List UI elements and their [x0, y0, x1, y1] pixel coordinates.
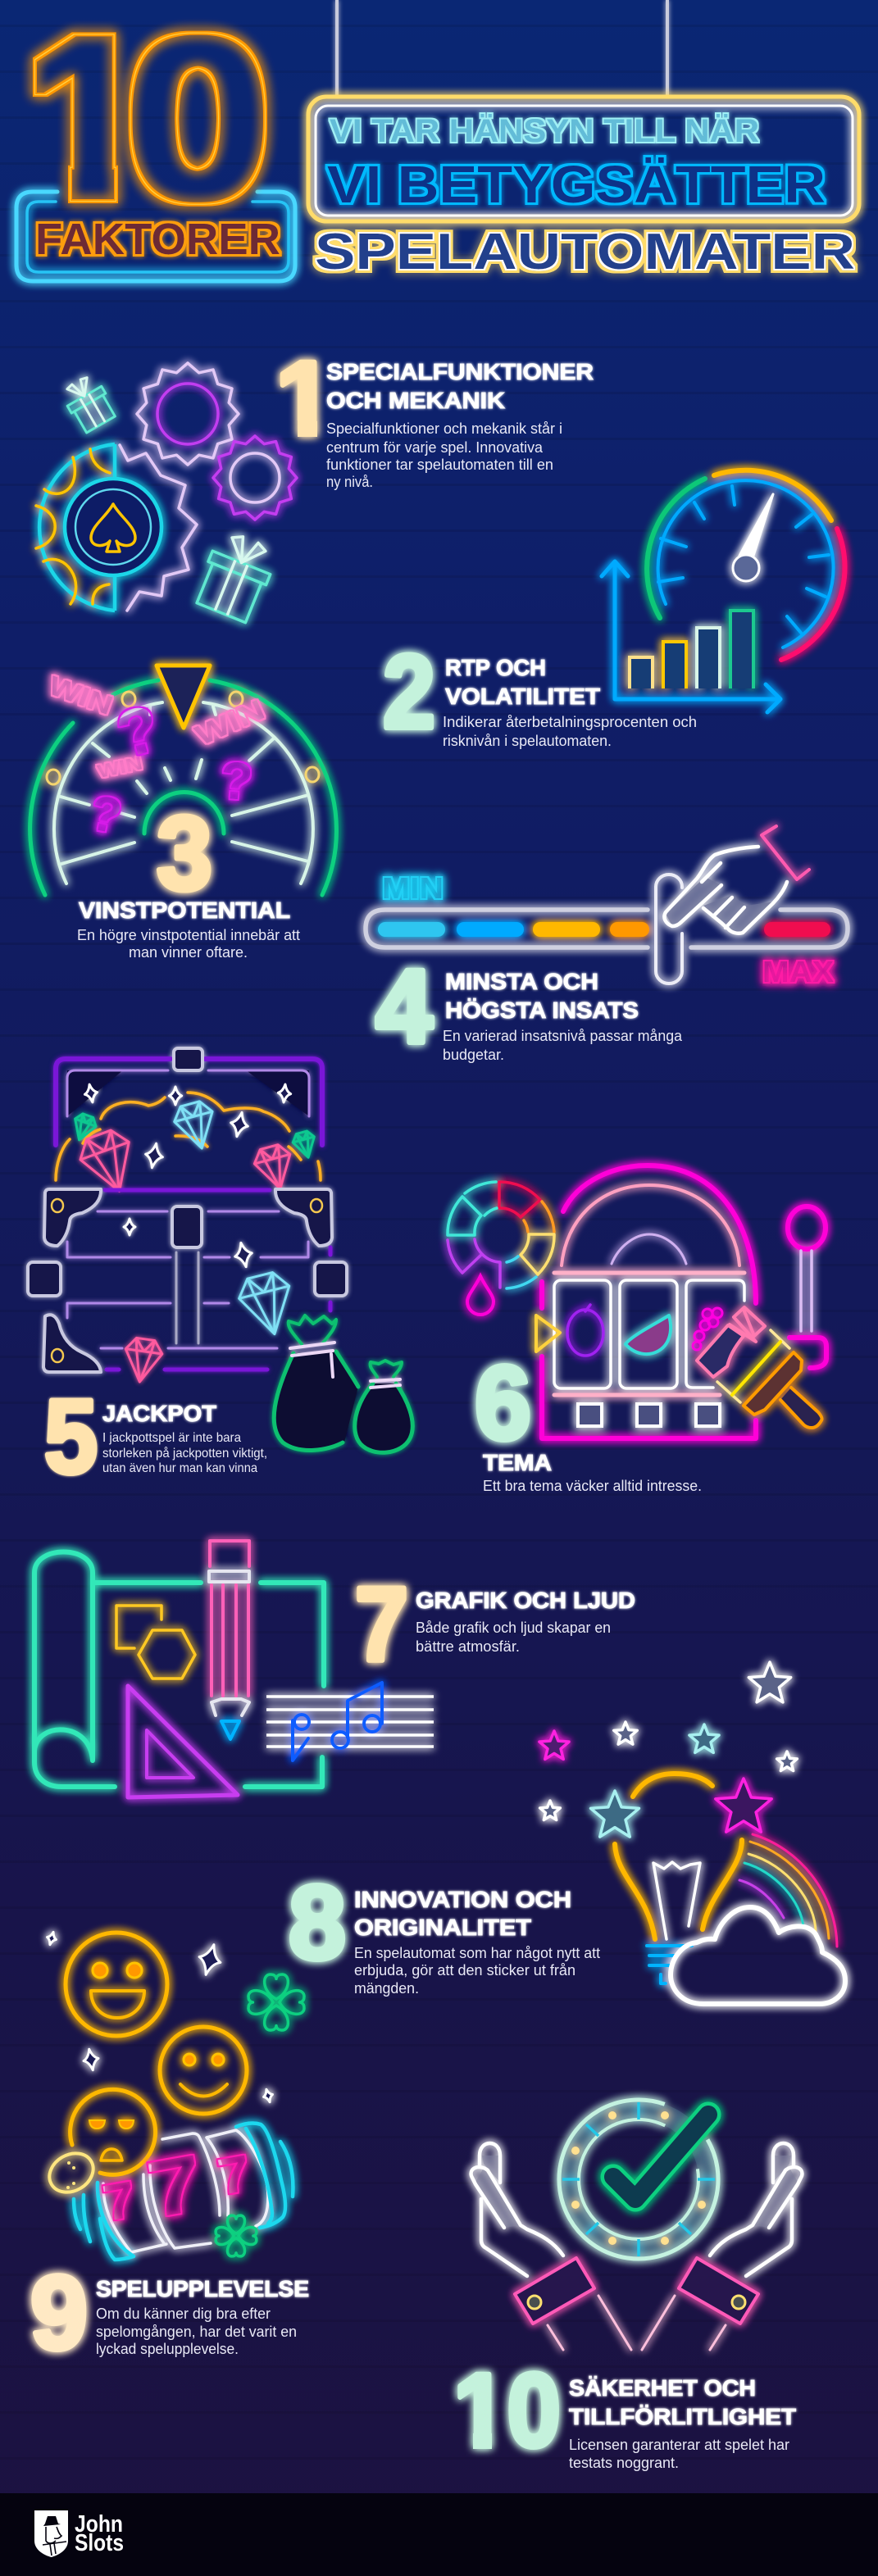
sevens: 7: [141, 2138, 210, 2235]
sign frame: [308, 97, 859, 221]
colour wheel: [448, 1182, 554, 1288]
heading 4: MINSTA OCH: [445, 969, 598, 994]
badge band: [569, 2110, 708, 2249]
heading 10: [569, 2375, 796, 2429]
chip: [36, 444, 161, 611]
sevens: [98, 2138, 255, 2235]
body 1: funktioner tar spelautomaten till en: [326, 457, 553, 473]
faktorer frame: [16, 192, 295, 281]
slider segments: [378, 922, 830, 937]
body 9: spelomgången, har det varit en: [96, 2324, 297, 2340]
icon: hands holding check badge: [471, 2070, 802, 2350]
paint brush: [697, 1307, 821, 1428]
music notes: [293, 1683, 382, 1760]
min label: MIN: [382, 871, 444, 905]
gold arcs: [56, 1093, 321, 1180]
sparkles: [84, 1084, 292, 1269]
reel housing: [74, 2124, 293, 2260]
heading 2: RTP OCH: [445, 655, 546, 680]
heading 4: HÖGSTA INSATS: [445, 997, 639, 1023]
body 1: ny nivå.: [326, 474, 373, 490]
question marks: [85, 691, 255, 844]
body 6: Ett bra tema väcker alltid intresse.: [483, 1478, 702, 1494]
heading 8: [354, 1887, 571, 1940]
panel: factor 10 security: [453, 2070, 802, 2471]
slider handle: [656, 875, 682, 984]
body 3: En högre vinstpotential innebär att: [77, 927, 300, 943]
icon: light bulb with stars, rainbow and cloud: [539, 1662, 845, 2004]
bars: [630, 611, 753, 688]
heading 2: [445, 655, 600, 709]
clovers: [216, 1974, 304, 2256]
question marks: ?: [109, 691, 167, 771]
check mark: [613, 2115, 708, 2199]
number 2: 2: [383, 634, 435, 751]
left hand: [471, 2143, 631, 2350]
hanging wires: [337, 0, 667, 96]
body 5: storleken på jackpotten viktigt,: [102, 1446, 267, 1461]
faktorer word: FAKTORER: [35, 215, 280, 264]
heading 1: SPECIALFUNKTIONER: [326, 359, 594, 384]
set square: [128, 1686, 238, 1797]
chest lines: [67, 1190, 330, 1370]
body 4: budgetar.: [443, 1047, 504, 1063]
badge rings: [530, 2070, 748, 2288]
win labels: WIN: [191, 694, 270, 752]
logo wordmark: [75, 2511, 124, 2556]
bulb: [615, 1774, 742, 1983]
footer: [0, 2493, 878, 2576]
number 7: 7: [355, 1566, 408, 1683]
icon: smileys and slot reels: [43, 1931, 304, 2260]
panel: factor 8 innovation: [289, 1662, 845, 2004]
axes: [602, 561, 780, 712]
heading 3: VINSTPOTENTIAL: [79, 897, 290, 923]
watermelon: [626, 1315, 671, 1354]
stars: [539, 1662, 797, 1837]
panel: factor 3 win potential: [30, 666, 336, 961]
question marks: ?: [218, 750, 255, 811]
body 9: [96, 2306, 297, 2357]
cuff: [762, 826, 809, 879]
top gear: [137, 363, 239, 465]
right reel: [207, 2130, 268, 2226]
left reel: [103, 2174, 166, 2252]
sad face: [71, 2089, 156, 2174]
number 6: 6: [475, 1345, 531, 1462]
reel pointer: [536, 1315, 560, 1352]
body 5: [102, 1431, 267, 1475]
icon: treasure chest: [28, 1048, 412, 1452]
sevens: 7: [213, 2145, 255, 2206]
gift large: [193, 528, 280, 625]
number 8: 8: [289, 1865, 346, 1982]
body 7: Både grafik och ljud skapar en: [416, 1620, 611, 1636]
sevens: 7: [98, 2171, 140, 2233]
machine arch: [542, 1165, 756, 1438]
body 8: En spelautomat som har något nytt att: [354, 1945, 600, 1961]
body 7: bättre atmosfär.: [416, 1638, 520, 1655]
grapes: [693, 1308, 722, 1350]
side gear: [213, 436, 297, 520]
logo shield: [34, 2510, 68, 2557]
heading 10: SÄKERHET OCH: [569, 2375, 756, 2401]
body 2: [443, 714, 697, 749]
body 8: erbjuda, gör att den sticker ut från: [354, 1962, 575, 1979]
yellow shapes: [116, 1606, 195, 1679]
heading 5: JACKPOT: [102, 1401, 216, 1426]
chest hardware: [28, 1189, 347, 1372]
body 3: man vinner oftare.: [129, 944, 248, 961]
badge ticks: [562, 2102, 715, 2256]
number 5: 5: [44, 1379, 98, 1496]
heading 7: GRAFIK OCH LJUD: [416, 1588, 635, 1613]
heading 1: OCH MEKANIK: [326, 388, 505, 413]
number 9: 9: [30, 2255, 88, 2372]
heading 6: TEMA: [483, 1450, 552, 1475]
panel: factor 9 game experience: [30, 1931, 309, 2372]
logo wordmark: Slots: [75, 2530, 124, 2556]
top clasp: [174, 1048, 202, 1070]
heading 4: [445, 969, 639, 1023]
gems: [69, 1099, 319, 1384]
music staff: [266, 1697, 434, 1747]
hand: [664, 847, 787, 934]
slider track: [366, 910, 848, 947]
body 8: mängden.: [354, 1980, 419, 1997]
lights: [47, 692, 319, 784]
right hand: [642, 2143, 802, 2350]
middle reel: [150, 2133, 220, 2248]
heading 1: [326, 359, 594, 413]
body 9: lyckad spelupplevelse.: [96, 2341, 239, 2357]
pencil: [209, 1541, 249, 1739]
panel: factor 6 theme: [448, 1165, 826, 1494]
icon: blueprint pencil and notes: [34, 1541, 434, 1797]
reels: [554, 1280, 744, 1426]
panel: factor 1 special features: [36, 340, 594, 625]
win labels: WIN: [45, 670, 116, 720]
icon: prize wheel: [30, 666, 336, 895]
title block: [16, 0, 859, 281]
lever: [788, 1206, 826, 1368]
chest rivets: [52, 1199, 322, 1362]
money bags: [274, 1315, 412, 1452]
gift small: [59, 372, 118, 434]
happy face: [66, 1933, 167, 2036]
pointer: [157, 666, 210, 728]
big gear: [120, 445, 197, 611]
panel: factor 2 rtp and volatility: [383, 470, 845, 751]
body 1: centrum för varje spel. Innovativa: [326, 439, 544, 456]
badge lights: [571, 2111, 706, 2245]
question marks: ?: [85, 784, 126, 844]
number 10: 10: [453, 2352, 561, 2469]
needle: [733, 494, 773, 581]
panel: factor 4 min and max bet: [366, 826, 848, 1065]
heading 8: INNOVATION OCH: [354, 1887, 571, 1912]
rainbow: [739, 1834, 837, 1947]
wheel rim: [30, 680, 336, 895]
number 4: 4: [375, 948, 433, 1065]
number 3: 3: [157, 795, 212, 912]
number 1: 1: [275, 340, 334, 457]
icon: bet slider: [366, 826, 848, 988]
lemon: [43, 2146, 100, 2200]
plum: [567, 1305, 603, 1356]
panel: factor 7 graphics and sound: [34, 1541, 635, 1797]
heading 2: VOLATILITET: [445, 684, 600, 709]
body 5: I jackpottspel är inte bara: [102, 1431, 241, 1445]
icon: gauge and bar chart: [602, 470, 845, 712]
body 9: Om du känner dig bra efter: [96, 2306, 271, 2322]
paint drop: [467, 1276, 494, 1315]
logo wordmark: John: [75, 2511, 123, 2537]
body 5: utan även hur man kan vinna: [102, 1461, 257, 1475]
sign line 2: VI BETYGSÄTTER: [327, 155, 826, 214]
spelautomater word: SPELAUTOMATER: [315, 224, 855, 280]
body 2: risknivån i spelautomaten.: [443, 733, 612, 749]
gauge segments: [647, 470, 845, 660]
body 8: [354, 1945, 600, 1997]
big number 10: [21, 20, 279, 217]
sign line 1: VI TAR HÄNSYN TILL NÄR: [330, 113, 759, 149]
body 4: [443, 1028, 683, 1063]
body 2: Indikerar återbetalningsprocenten och: [443, 714, 697, 730]
body 1: Specialfunktioner och mekanik står i: [326, 420, 562, 437]
body 10: [569, 2437, 789, 2471]
heading 10: TILLFÖRLITLIGHET: [569, 2404, 796, 2429]
heading 9: SPELUPPLEVELSE: [96, 2276, 309, 2301]
gauge dial: [658, 480, 834, 647]
icon: casino chip and gears: [36, 363, 297, 625]
cloud: [671, 1907, 845, 2004]
body 10: Licensen garanterar att spelet har: [569, 2437, 789, 2453]
sparkles: [46, 1931, 274, 2103]
body 4: En varierad insatsnivå passar många: [443, 1028, 683, 1044]
win labels: [45, 670, 270, 782]
chest lid: [56, 1059, 322, 1145]
blueprint scroll: [34, 1552, 324, 1787]
body 7: [416, 1620, 611, 1655]
body 1: [326, 420, 562, 490]
win labels: WIN: [96, 752, 144, 782]
chest dark interior: [67, 1070, 309, 1116]
heading 8: ORIGINALITET: [354, 1915, 531, 1940]
body 10: testats noggrant.: [569, 2455, 679, 2471]
max label: MAX: [762, 955, 834, 988]
smiling face: [160, 2027, 247, 2114]
icon: slot machine and colour wheel: [448, 1165, 826, 1438]
body 3: [77, 927, 300, 961]
panel: factor 5 jackpot: [28, 1048, 412, 1496]
